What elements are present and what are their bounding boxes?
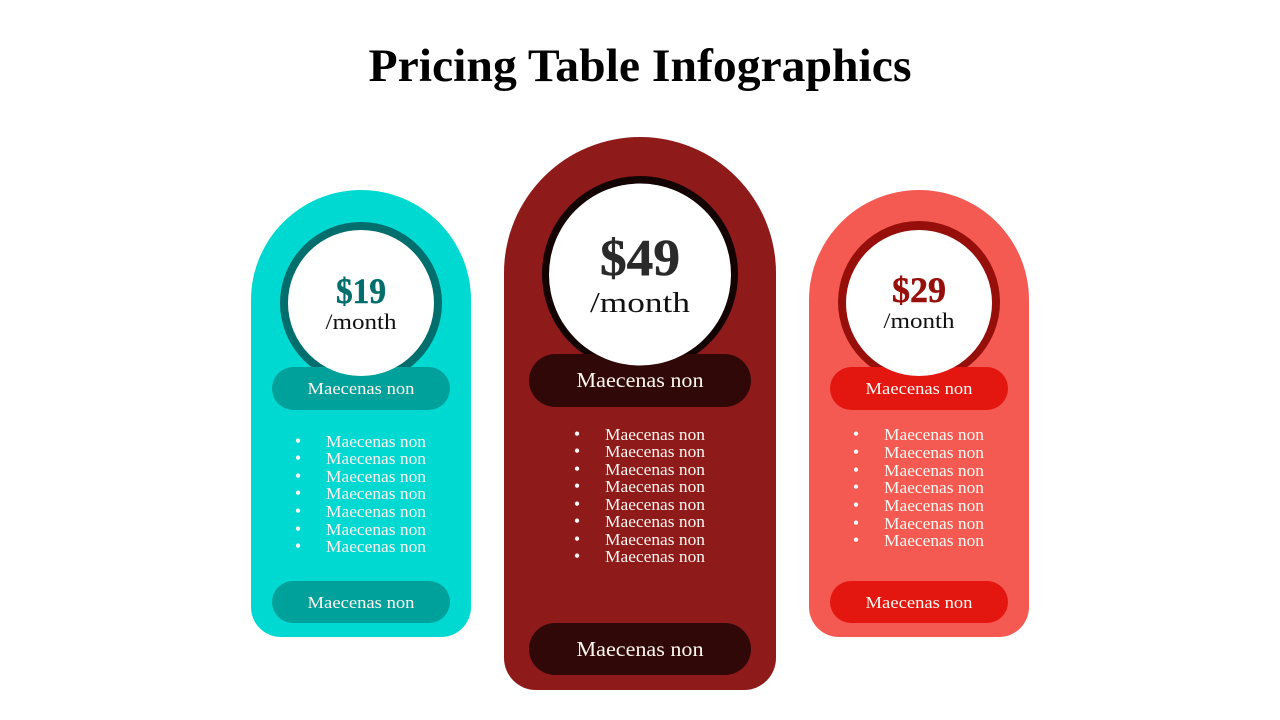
feature list: $19: Maecenas non — [326, 467, 427, 486]
feature list: $29: Maecenas non — [884, 531, 985, 550]
price: $49: $49 — [600, 230, 680, 287]
feature list: $19: Maecenas non — [326, 520, 427, 539]
card background: $19 — [251, 190, 471, 637]
feature list: $49: Maecenas non — [605, 460, 706, 479]
footer button: $19: Maecenas non — [308, 593, 415, 612]
feature list: $29: Maecenas non — [884, 478, 985, 497]
feature list: $19: • — [295, 483, 301, 503]
feature list: $49: • — [574, 459, 580, 479]
header label: $49: Maecenas non — [576, 368, 704, 392]
panel: $49 plan — [504, 137, 776, 690]
feature list: $49: • — [574, 546, 580, 566]
feature list: $29: • — [853, 513, 859, 533]
feature list: $49: • — [574, 441, 580, 461]
feature list: $49: Maecenas non — [605, 442, 706, 461]
feature list: $49: Maecenas non — [605, 477, 706, 496]
feature list: $29: Maecenas non — [884, 443, 985, 462]
feature list: $29: • — [853, 424, 859, 444]
feature list: $29: • — [853, 477, 859, 497]
feature list: $49: • — [574, 511, 580, 531]
feature list: $49: Maecenas non — [605, 495, 706, 514]
period: $29: /month — [884, 308, 954, 333]
header label: $19: Maecenas non — [308, 379, 415, 398]
period: $19: /month — [326, 309, 396, 334]
feature list: $19: • — [295, 448, 301, 468]
header pill: $49 — [529, 354, 751, 407]
feature list: $19 — [295, 431, 427, 556]
feature list: $19: • — [295, 501, 301, 521]
feature list: $29: • — [853, 530, 859, 550]
header label: $29: Maecenas non — [866, 379, 973, 398]
feature list: $29: Maecenas non — [884, 425, 985, 444]
period: $49: /month — [590, 287, 691, 319]
panel: $19 plan — [251, 190, 471, 637]
footer button: $19 — [272, 581, 450, 623]
feature list: $19: Maecenas non — [326, 432, 427, 451]
feature list: $19: Maecenas non — [326, 449, 427, 468]
footer button: $29: Maecenas non — [866, 593, 973, 612]
feature list: $49: • — [574, 476, 580, 496]
feature list: $19: • — [295, 536, 301, 556]
price ring: $19 — [280, 222, 442, 384]
header pill: $19 — [272, 367, 450, 410]
price circle: $49 — [549, 184, 731, 366]
feature list: $49: • — [574, 424, 580, 444]
card background: $49 — [504, 137, 776, 690]
feature list: $19: • — [295, 466, 301, 486]
price circle: $19 — [288, 230, 434, 376]
feature list: $49: Maecenas non — [605, 425, 706, 444]
feature list: $29: • — [853, 460, 859, 480]
feature list: $49: Maecenas non — [605, 530, 706, 549]
footer button: $29 — [830, 581, 1008, 623]
feature list: $49: • — [574, 529, 580, 549]
feature list: $19: Maecenas non — [326, 502, 427, 521]
feature list: $29: Maecenas non — [884, 461, 985, 480]
price circle: $29 — [846, 230, 992, 376]
feature list: $49: • — [574, 494, 580, 514]
feature list: $49 — [574, 424, 706, 566]
footer button: $49: Maecenas non — [576, 637, 704, 661]
feature list: $19: Maecenas non — [326, 484, 427, 503]
price: $29: $29 — [892, 270, 946, 310]
price ring: $29 — [838, 221, 1000, 383]
feature list: $29: Maecenas non — [884, 514, 985, 533]
panel: $29 plan — [809, 190, 1029, 637]
feature list: $29 — [853, 424, 985, 550]
feature list: $29: • — [853, 495, 859, 515]
feature list: $29: Maecenas non — [884, 496, 985, 515]
card background: $29 — [809, 190, 1029, 637]
feature list: $49: Maecenas non — [605, 512, 706, 531]
feature list: $29: • — [853, 442, 859, 462]
header pill: $29 — [830, 367, 1008, 410]
feature list: $19: Maecenas non — [326, 537, 427, 556]
title: Pricing Table Infographics — [368, 40, 912, 92]
price ring: $49 — [542, 176, 738, 372]
feature list: $49: Maecenas non — [605, 547, 706, 566]
feature list: $19: • — [295, 431, 301, 451]
price: $19: $19 — [336, 271, 386, 311]
feature list: $19: • — [295, 519, 301, 539]
footer button: $49 — [529, 623, 751, 675]
